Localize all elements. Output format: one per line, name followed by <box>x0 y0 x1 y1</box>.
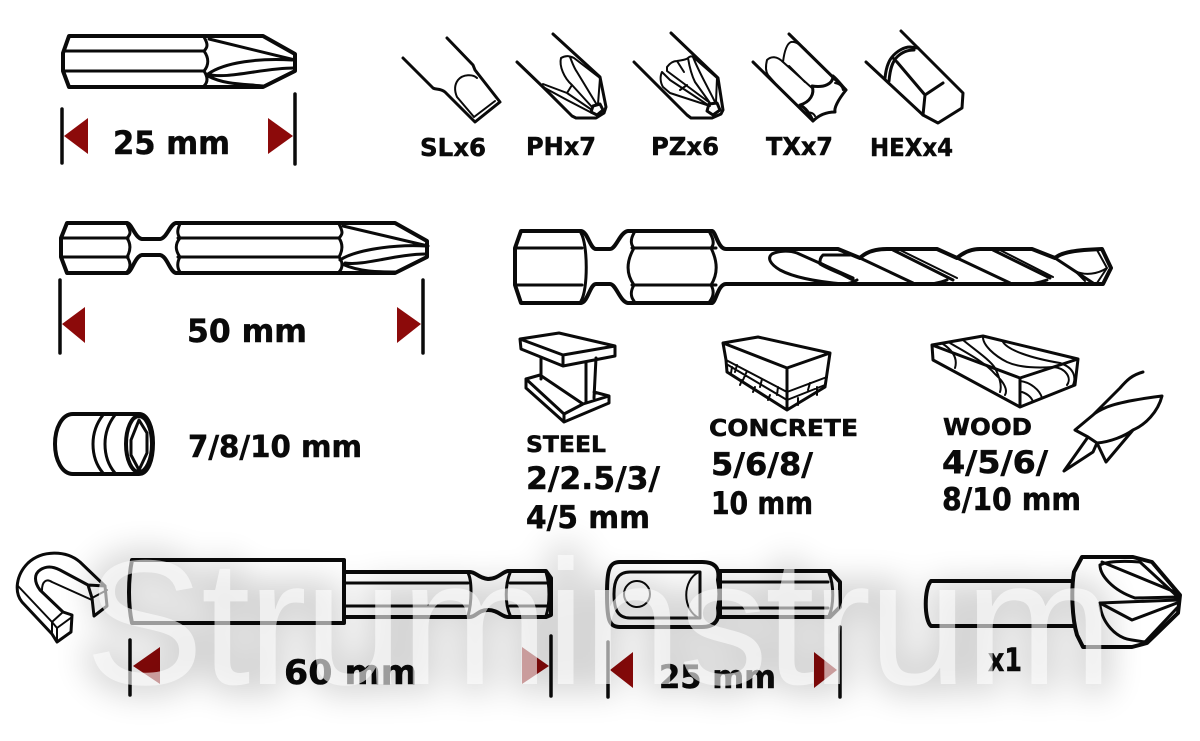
bit type labels: TXx7 <box>766 132 833 161</box>
icon: wood drill tip <box>1064 372 1162 471</box>
bit type labels: PHx7 <box>526 132 596 161</box>
label: steel sizes: 2/2.5/3/ <box>526 461 661 497</box>
dimension: 25 mm adapter: 25 mm <box>659 658 776 696</box>
icon: magnetic hook <box>17 553 107 642</box>
bit type labels: PZx6 <box>651 132 719 161</box>
bit type labels: SLx6 <box>420 133 486 162</box>
bit type labels <box>420 132 953 162</box>
icon: concrete block <box>723 337 830 410</box>
25 mm bit <box>63 36 295 87</box>
label: wood sizes: WOOD <box>943 415 1032 441</box>
bit holder 60 mm <box>129 560 551 623</box>
dimension: 60 mm <box>130 636 551 696</box>
dimension: 25 mm adapter <box>608 627 840 697</box>
watermark: Struminstrum <box>85 523 1113 722</box>
countersink bit <box>926 557 1180 647</box>
label: concrete sizes <box>709 416 858 522</box>
label: steel sizes: 4/5 mm <box>526 500 650 536</box>
dimension: 25 mm <box>62 94 295 164</box>
label: concrete sizes: CONCRETE <box>709 416 858 442</box>
watermark: Struminstrum <box>85 523 1113 722</box>
label: wood sizes <box>942 415 1081 518</box>
icon: hex bit <box>866 31 963 123</box>
50 mm double bit <box>61 223 428 273</box>
label: wood sizes: 8/10 mm <box>942 482 1081 518</box>
label: concrete sizes: 5/6/8/ <box>711 447 814 483</box>
icon: phillips bit <box>517 34 606 118</box>
label: steel sizes: STEEL <box>526 433 606 458</box>
icon: slotted bit <box>403 38 500 122</box>
dimension: 50 mm: 50 mm <box>187 312 307 350</box>
label: socket sizes: 7/8/10 mm <box>188 430 362 465</box>
icon: socket adapter <box>55 414 153 474</box>
dimension: 25 mm: 25 mm <box>113 124 230 162</box>
drill bit <box>515 231 1111 303</box>
icon: pozidriv bit <box>634 33 723 118</box>
dimension: 60 mm: 60 mm <box>284 653 417 693</box>
label: wood sizes: 4/5/6/ <box>942 445 1049 481</box>
icon: steel I-beam <box>520 333 615 422</box>
label: concrete sizes: 10 mm <box>711 486 813 522</box>
bit type labels: HEXx4 <box>870 133 953 162</box>
label: x1: x1 <box>988 641 1022 679</box>
dimension: 50 mm <box>60 280 423 353</box>
socket adapter bit <box>607 562 840 627</box>
icon: wood plank <box>932 336 1078 407</box>
label: steel sizes <box>526 433 661 536</box>
icon: torx bit <box>753 34 846 121</box>
